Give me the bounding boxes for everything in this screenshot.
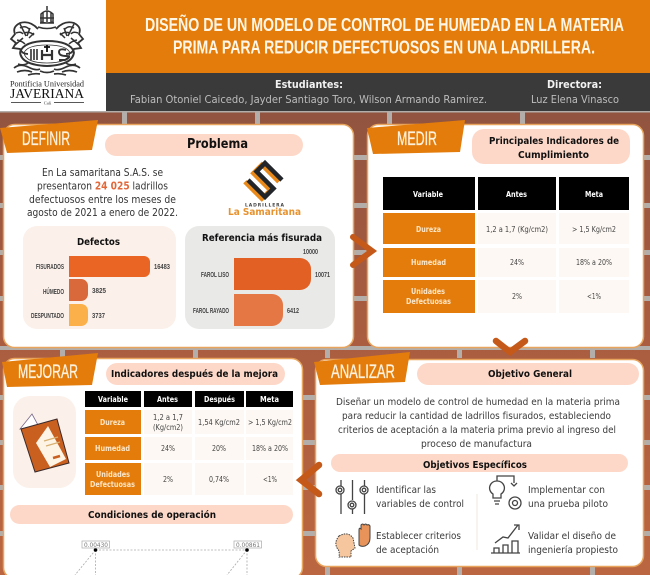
text: problem description: presentaron 24 025 ladrillos [37, 180, 168, 192]
objective: establecer criterios [336, 524, 461, 557]
heading: objetivos especificos: Objetivos Específicos [423, 460, 527, 471]
chart: defectos: Defectos [77, 237, 120, 248]
header: authors bar [106, 73, 650, 111]
text: problem description [27, 167, 178, 219]
heading: principales indicadores [472, 129, 630, 164]
table: indicadores despues: > 1,5 Kg/cm2 [248, 418, 292, 427]
tab: medir: MEDIR [397, 128, 437, 150]
heading: principales indicadores: Cumplimiento [518, 150, 589, 161]
icon: book [13, 396, 76, 488]
arrow: medir to analizar [496, 341, 525, 352]
table: indicadores despues: Después [204, 395, 235, 404]
header: university logo: Pontificia Universidad [10, 80, 84, 88]
heading: objetivo general [417, 363, 639, 385]
objective: establecer criterios: Establecer criterios [376, 531, 461, 542]
heading: problema [105, 134, 303, 156]
table: indicadores: Defectuosas [406, 297, 451, 306]
header: authors bar: Fabian Otoniel Caicedo, Jayder Santiago Toro, Wilson Armando Ramirez. [130, 93, 487, 106]
table: indicadores despues: Variable [98, 395, 128, 404]
table: indicadores despues: <1% [263, 475, 277, 484]
table: indicadores: <1% [587, 292, 601, 301]
heading: indicadores despues [106, 363, 285, 385]
table: indicadores despues: 24% [161, 444, 175, 453]
table: indicadores: 18% a 20% [576, 258, 612, 267]
text: problem description: agosto de 2021 a enero de 2022. [27, 207, 178, 219]
table: indicadores despues: 1,54 Kg/cm2 [198, 418, 240, 427]
table: indicadores despues: 20% [212, 444, 226, 453]
text: objetivo general: Diseñar un modelo de control de humedad en la materia prima [336, 397, 620, 408]
text: objetivo general [336, 397, 620, 450]
table: indicadores: Unidades [411, 287, 445, 296]
chart: referencia mas fisurada: 10071 [315, 270, 330, 279]
table: indicadores: 24% [510, 258, 524, 267]
text: objetivo general: criterios de aceptación a la materia prima previo al ingreso del [338, 424, 616, 436]
chart: condiciones de operacion diagram [75, 541, 262, 575]
chart: defectos: 3737 [92, 311, 105, 320]
tab: mejorar: MEJORAR [18, 361, 78, 383]
table: indicadores despues: (Kg/cm2) [153, 423, 183, 432]
heading: indicadores despues: Indicadores después de la mejora [111, 368, 278, 380]
table: indicadores: Dureza [416, 225, 441, 234]
chart: referencia mas fisurada: FAROL LISO [201, 270, 229, 279]
objective: identificar variables [336, 480, 464, 514]
table: indicadores despues: Humedad [95, 444, 130, 453]
chart: condiciones de operacion diagram: 0.00861 [236, 542, 260, 549]
icon: la samaritana logo: LADRILLERA [245, 202, 285, 208]
table: indicadores despues: 0,74% [209, 475, 229, 484]
objective: implementar prueba piloto: Implementar con [528, 485, 605, 496]
arrow: definir to medir [353, 237, 372, 265]
arrow: analizar to mejorar [301, 465, 319, 494]
table: indicadores: Meta [585, 190, 603, 199]
table: indicadores despues: Unidades [96, 470, 130, 479]
table: indicadores: > 1,5 Kg/cm2 [572, 225, 616, 234]
divider [476, 494, 478, 550]
header: university logo: JAVERIANA [10, 86, 84, 101]
tab: analizar [314, 352, 410, 385]
panel: mejorar [2, 353, 302, 575]
objective: validar diseno: Validar el diseño de [528, 531, 616, 542]
header: authors bar: Estudiantes: [275, 78, 343, 91]
table: indicadores despues: Meta [260, 395, 279, 404]
chart: referencia mas fisurada [185, 226, 335, 329]
objective: identificar variables: variables de control [376, 499, 464, 510]
header: university logo: Cali [44, 100, 52, 106]
text: problem description: En La samaritana S.A.S. se [42, 167, 163, 179]
objective: establecer criterios: de aceptación [376, 544, 439, 556]
table: indicadores [383, 177, 629, 313]
heading: condiciones de operacion [10, 505, 293, 524]
panel: definir [0, 120, 354, 348]
chart: defectos: HÚMEDO [43, 287, 64, 296]
chart: defectos: FISURADOS [36, 262, 64, 271]
table: indicadores: Variable [413, 190, 443, 199]
chart: defectos: DESPUNTADO [31, 311, 64, 320]
heading: problema: Problema [187, 136, 248, 152]
header: university logo [0, 0, 106, 111]
chart: defectos: 16483 [154, 262, 170, 271]
icon: la samaritana logo [228, 162, 301, 218]
table: indicadores: Humedad [411, 258, 446, 267]
table: indicadores: 1,2 a 1,7 (Kg/cm2) [486, 225, 548, 234]
text: objetivo general: para reducir la cantidad de ladrillos fisurados, estableciendo [342, 411, 611, 422]
tab: analizar: ANALIZAR [331, 361, 395, 383]
tab: mejorar [2, 353, 98, 387]
table: indicadores despues: 2% [163, 475, 173, 484]
heading: condiciones de operacion: Condiciones de operación [88, 509, 216, 521]
panel: analizar [314, 352, 644, 566]
icon: university crest [11, 6, 83, 75]
icon: la samaritana logo: La Samaritana [228, 207, 301, 218]
chart: referencia mas fisurada: 10000 [303, 247, 318, 256]
chart: defectos [23, 226, 176, 329]
tab: definir [0, 120, 98, 153]
objective: identificar variables: Identificar las [376, 485, 436, 496]
tab: medir [367, 120, 465, 154]
header: authors bar: Luz Elena Vinasco [531, 93, 619, 106]
objective: validar diseno: ingeniería propiesto [528, 544, 618, 556]
table: indicadores despues: 1,2 a 1,7 [153, 413, 183, 422]
table: indicadores despues: 18% a 20% [252, 444, 288, 453]
chart: referencia mas fisurada: 6412 [287, 306, 299, 315]
table: indicadores: 2% [512, 292, 522, 301]
chart: referencia mas fisurada: Referencia más fisurada [202, 232, 322, 244]
panel: medir [367, 120, 644, 348]
heading: principales indicadores: Principales Indicadores de [489, 136, 619, 147]
objective: implementar prueba piloto: una prueba piloto [528, 499, 608, 510]
table: indicadores despues: Antes [157, 395, 178, 404]
text: objetivo general: proceso de manufactura [421, 439, 532, 450]
table: indicadores despues: Dureza [100, 418, 125, 427]
objective: implementar prueba piloto [490, 476, 608, 510]
heading: objetivo general: Objetivo General [488, 369, 572, 380]
tab: definir: DEFINIR [22, 128, 70, 150]
objective: validar diseno [491, 525, 618, 556]
table: indicadores despues [85, 391, 293, 495]
chart: defectos: 3825 [92, 286, 106, 295]
table: indicadores despues: Defectuosas [90, 480, 135, 489]
text: problem description: defectuosos entre los meses de [29, 194, 176, 206]
chart: condiciones de operacion diagram: 0.00430 [84, 542, 108, 549]
chart: referencia mas fisurada: FAROL RAYADO [193, 306, 229, 315]
header: title banner [106, 0, 650, 73]
heading: objetivos especificos [331, 454, 628, 472]
table: indicadores: Antes [506, 190, 527, 199]
header: authors bar: Directora: [547, 78, 602, 91]
